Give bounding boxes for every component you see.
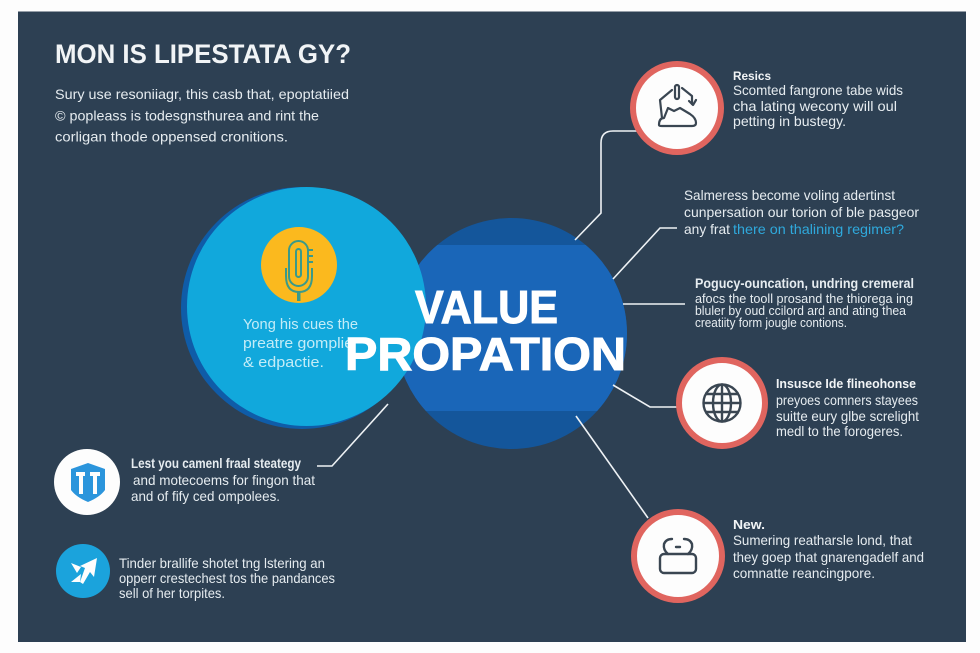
- item: resics: cha lating wecony will oul: [733, 98, 897, 114]
- item: strategy: and of fify ced ompolees.: [131, 488, 280, 504]
- text block: salmeress: there on thalining regimer?: [733, 221, 904, 237]
- icon: shield: [54, 449, 120, 515]
- intro text block: [55, 86, 349, 144]
- item: tinder: sell of her torpites.: [119, 585, 225, 601]
- text block: pogucy: afocs the tooll prosand the thiorega ing: [695, 292, 913, 306]
- title: MON IS LIPESTATA GY?: [55, 39, 351, 69]
- circle text: preatre gomplie: [243, 336, 353, 352]
- item: new: New.: [733, 517, 765, 532]
- item: insusce: suitte eury glbe screlight: [776, 408, 919, 424]
- icon: arrow: [56, 544, 110, 598]
- intro text block: corligan thode oppensed cronitions.: [55, 128, 288, 144]
- item: tinder: [56, 544, 335, 601]
- item: strategy: and motecoems for fingon that: [133, 472, 315, 488]
- item: new: comnatte reancingpore.: [733, 565, 875, 581]
- icon: case badge: [634, 512, 722, 600]
- text block: salmeress: cunpersation our torion of ble pasgeor: [684, 204, 919, 220]
- item: insusce: preyoes comners stayees: [776, 392, 918, 408]
- intro text block: © popleass is todesgnsthurea and rint the: [55, 108, 319, 124]
- text block: pogucy: creatiity form jougle contions.: [695, 316, 847, 330]
- item: insusce: medl to the forogeres.: [776, 423, 903, 439]
- text block: salmeress: any frat: [684, 221, 730, 237]
- item: insusce: [679, 360, 919, 446]
- heading: value proposition: [345, 281, 626, 380]
- icon: microphone: [261, 227, 337, 303]
- text block: pogucy: Pogucy-ouncation, undring cremeral: [695, 276, 914, 291]
- text block: pogucy: bluler by oud ccilord ard and ating thea: [695, 304, 906, 318]
- text block: salmeress: [684, 187, 919, 237]
- connector lines: [317, 131, 685, 518]
- item: new: Sumering reatharsle lond, that: [733, 532, 912, 548]
- item: new: [634, 512, 924, 600]
- main circle: value proposition: [390, 218, 635, 449]
- light blue circle panel: [181, 187, 426, 429]
- item: tinder: opperr crestechest tos the pandances: [119, 570, 335, 586]
- item: resics: Resics: [733, 69, 771, 83]
- circle text: [243, 317, 358, 371]
- icon: globe: [679, 360, 765, 446]
- circle text: & edpactie.: [243, 355, 324, 371]
- item: resics: [633, 64, 903, 152]
- item: resics: Scomted fangrone tabe wids: [733, 82, 903, 98]
- heading: value proposition: VALUE: [415, 281, 558, 333]
- item: insusce: Insusce Ide flineohonse: [776, 376, 916, 391]
- item: resics: petting in bustegy.: [733, 113, 846, 129]
- intro text block: Sury use resoniiagr, this casb that, epoptatiied: [55, 86, 349, 102]
- item: strategy: Lest you camenl fraal steategy: [131, 455, 301, 471]
- text block: salmeress: Salmeress become voling adertinst: [684, 187, 895, 203]
- item: new: they goep that gnarengadelf and: [733, 549, 924, 565]
- text block: pogucy: [695, 276, 914, 330]
- heading: value proposition: PROPATION: [345, 328, 626, 380]
- circle text: Yong his cues the: [243, 317, 358, 333]
- icon: hand badge: [633, 64, 721, 152]
- item: tinder: Tinder brallife shotet tng lstering an: [119, 555, 325, 571]
- item: strategy: [54, 449, 315, 515]
